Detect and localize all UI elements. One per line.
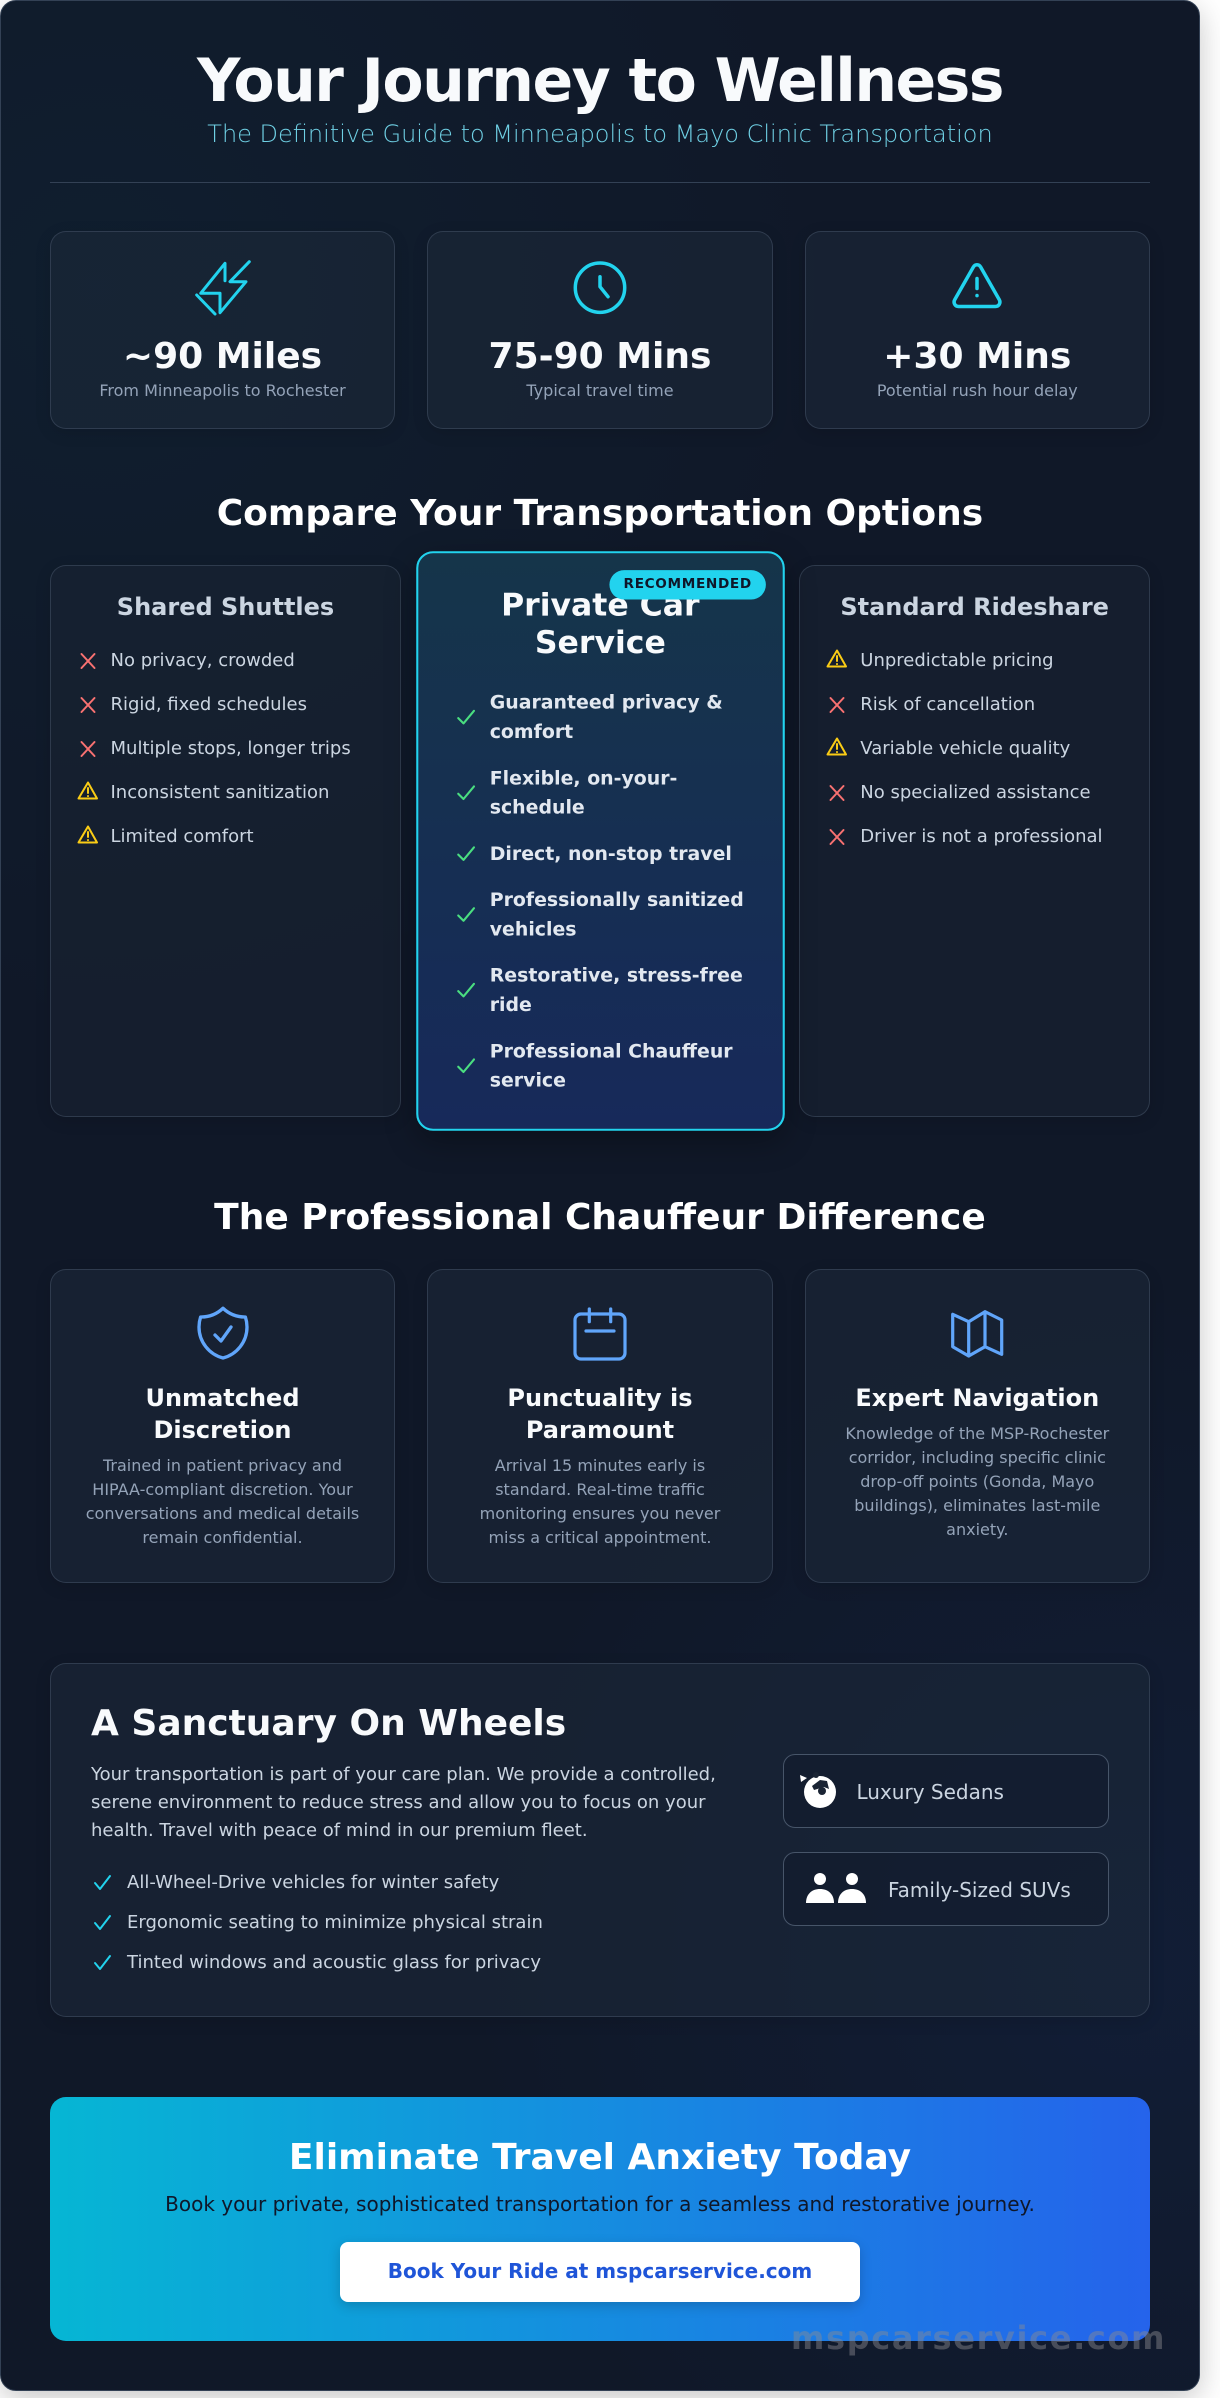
- card title: [507, 1384, 693, 1444]
- cta button: [340, 2242, 860, 2302]
- description: standard. Real-time traffic: [495, 1480, 705, 1499]
- fleet: luxury sedans: [783, 1754, 1109, 1828]
- item: Guaranteed privacy &: [489, 692, 722, 714]
- panel: distance stat: [50, 231, 395, 429]
- description: [86, 1456, 359, 1547]
- panel: delay stat: [805, 231, 1150, 429]
- item: No specialized assistance: [860, 782, 1091, 802]
- fleet: family suvs: [783, 1852, 1109, 1926]
- header: [50, 46, 1150, 183]
- icons: x and warning: [826, 650, 847, 845]
- divider line: [50, 182, 1150, 183]
- panel: punctuality: [427, 1269, 773, 1583]
- icon: map: [951, 1310, 1004, 1358]
- description: corridor, including specific clinic: [849, 1448, 1106, 1467]
- card title: [145, 1384, 300, 1444]
- icon: clock: [574, 261, 626, 314]
- icon: lightning bolt: [195, 260, 251, 316]
- column title: Standard Rideshare: [840, 593, 1109, 621]
- paragraph: serene environment to reduce stress and allow you to focus on your: [91, 1792, 706, 1813]
- item: Multiple stops, longer trips: [110, 738, 351, 758]
- panel: private car service: [416, 552, 784, 1131]
- description: Trained in patient privacy and: [103, 1456, 342, 1475]
- panel: shared shuttles: [50, 565, 401, 1117]
- description: Knowledge of the MSP-Rochester: [845, 1424, 1109, 1443]
- card title: Punctuality is: [507, 1384, 693, 1412]
- value: +30 Mins: [883, 336, 1071, 377]
- item: comfort: [489, 722, 573, 744]
- icons: checks: [94, 1875, 111, 1970]
- item: Professional Chauffeur: [489, 1041, 732, 1063]
- feature: Ergonomic seating to minimize physical strain: [127, 1912, 543, 1933]
- list: [826, 650, 1103, 846]
- feature list: [94, 1872, 543, 1973]
- cta heading: Eliminate Travel Anxiety Today: [289, 2136, 911, 2178]
- watermark: mspcarservice.com: [791, 2318, 1166, 2356]
- item: Rigid, fixed schedules: [110, 694, 307, 714]
- item: Unpredictable pricing: [860, 650, 1054, 670]
- cta button: Book Your Ride at mspcarservice.com: [388, 2259, 812, 2283]
- item: Risk of cancellation: [860, 694, 1035, 714]
- heading: chauffeur difference: The Professional Chauffeur Difference: [214, 1196, 986, 1238]
- panel: navigation: [805, 1269, 1150, 1583]
- subtitle: The Definitive Guide to Minneapolis to Mayo Clinic Transportation: [207, 120, 993, 148]
- description: buildings), eliminates last-mile: [854, 1496, 1100, 1515]
- heading: A Sanctuary On Wheels: [91, 1703, 566, 1744]
- item: [489, 965, 743, 1017]
- paragraph: Your transportation is part of your care plan. We provide a controlled,: [91, 1764, 716, 1785]
- icon: sedan glyph: [800, 1775, 836, 1808]
- icons: x and warning: [78, 653, 98, 844]
- item: Limited comfort: [110, 826, 254, 846]
- item: Variable vehicle quality: [860, 738, 1070, 758]
- item: Direct, non-stop travel: [489, 843, 732, 866]
- heading: compare: Compare Your Transportation Options: [217, 493, 983, 534]
- icon: calendar: [573, 1307, 627, 1361]
- column title: Private Car: [501, 587, 699, 624]
- label: Family-Sized SUVs: [888, 1878, 1071, 1902]
- card title: Expert Navigation: [855, 1384, 1099, 1412]
- card title: Discretion: [153, 1416, 292, 1444]
- item: Driver is not a professional: [860, 826, 1103, 846]
- label: From Minneapolis to Rochester: [99, 381, 346, 400]
- title: Your Journey to Wellness: [197, 46, 1003, 116]
- item: Restorative, stress-free: [489, 965, 743, 987]
- cta text: Book your private, sophisticated transportation for a seamless and restorative journey.: [165, 2192, 1035, 2216]
- description: monitoring ensures you never: [480, 1504, 720, 1523]
- feature: Tinted windows and acoustic glass for privacy: [127, 1952, 541, 1973]
- item: Professionally sanitized: [489, 890, 743, 912]
- description: [480, 1456, 720, 1547]
- item: vehicles: [489, 919, 576, 941]
- column title: Shared Shuttles: [117, 593, 334, 621]
- card title: Paramount: [526, 1416, 674, 1444]
- value: ~90 Miles: [123, 336, 322, 377]
- list: [78, 650, 351, 846]
- description: Arrival 15 minutes early is: [495, 1456, 705, 1475]
- paragraph: health. Travel with peace of mind in our premium fleet.: [91, 1820, 588, 1841]
- item: service: [489, 1070, 566, 1092]
- description: [845, 1424, 1110, 1539]
- item: schedule: [489, 797, 584, 819]
- badge: recommended: RECOMMENDED: [623, 577, 752, 593]
- item: Inconsistent sanitization: [110, 782, 329, 802]
- label: Typical travel time: [526, 381, 674, 400]
- item: Flexible, on-your-: [489, 768, 677, 790]
- feature: All-Wheel-Drive vehicles for winter safety: [127, 1872, 499, 1893]
- item: [489, 890, 743, 941]
- paragraph: [91, 1764, 716, 1841]
- item: [489, 692, 722, 744]
- icons: check marks: [457, 710, 476, 1074]
- card title: Unmatched: [145, 1384, 300, 1412]
- column title: [501, 587, 700, 662]
- description: remain confidential.: [142, 1528, 303, 1547]
- value: 75-90 Mins: [489, 336, 711, 377]
- panel: discretion: [50, 1269, 395, 1583]
- icon: warning triangle: [952, 263, 1002, 308]
- item: No privacy, crowded: [110, 650, 295, 670]
- item: [489, 768, 677, 819]
- label: Luxury Sedans: [856, 1780, 1004, 1804]
- item: [489, 1041, 732, 1092]
- icon: two people: [806, 1873, 866, 1903]
- panel: sanctuary on wheels: [50, 1663, 1150, 2017]
- description: miss a critical appointment.: [488, 1528, 712, 1547]
- column title: Service: [535, 626, 666, 662]
- description: drop-off points (Gonda, Mayo: [860, 1472, 1094, 1491]
- panel: time stat: [427, 231, 773, 429]
- badge: recommended: [609, 571, 766, 600]
- call to action banner: [50, 2097, 1150, 2341]
- description: conversations and medical details: [86, 1504, 359, 1523]
- item: ride: [489, 995, 532, 1017]
- description: anxiety.: [946, 1520, 1008, 1539]
- label: Potential rush hour delay: [877, 381, 1078, 400]
- description: HIPAA-compliant discretion. Your: [92, 1480, 353, 1499]
- panel: standard rideshare: [799, 565, 1150, 1117]
- icon: shield: [197, 1306, 249, 1360]
